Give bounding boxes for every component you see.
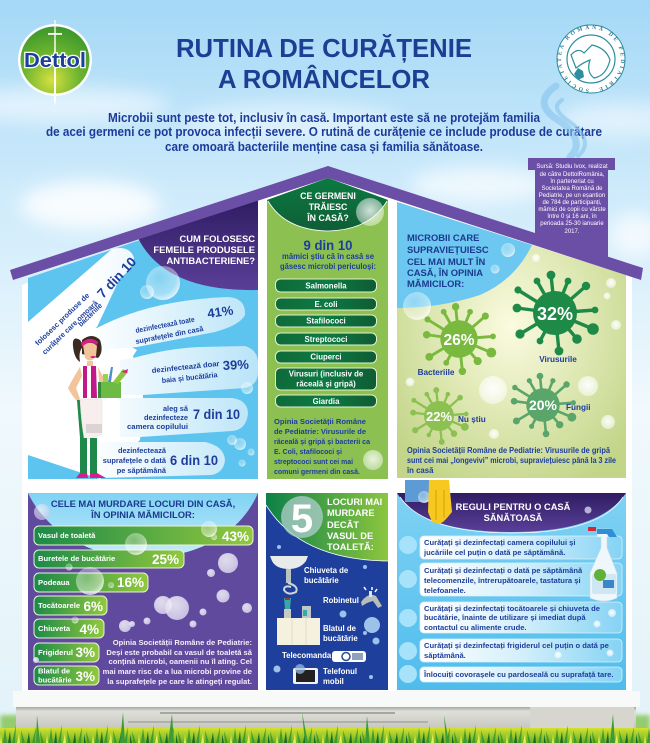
source box: Societatea Română de <box>541 186 603 192</box>
bar labels: Podeaua <box>38 578 70 587</box>
source box: de 784 de participanți, <box>542 200 602 206</box>
rule text: Curățați și dezinfectați o dată pe săptămână <box>424 566 583 575</box>
virus: 32% <box>513 271 599 364</box>
source box: Sursă: Studiu Ivox, realizat <box>536 164 608 170</box>
green header: TOALETĂ: <box>327 542 374 552</box>
intro text: Microbii sunt peste tot, inclusiv în casă. Important este să ne protejăm familia <box>108 111 541 125</box>
virus: 22%: 22% <box>426 409 452 424</box>
ray 2: 41%: 41% <box>206 302 235 321</box>
roof <box>10 166 643 280</box>
ray 3: 39% <box>120 346 258 395</box>
icon: mobile phone: mobil <box>323 677 344 686</box>
ray 3: 39%: baia și bucătăria <box>161 370 219 385</box>
heading: CELE MAI MURDARE LOCURI DIN CASĂ, <box>51 498 235 509</box>
heading: MĂMICILOR: <box>407 278 464 289</box>
icon: woman with cleaning box <box>68 336 128 478</box>
opinion text: Opinia Societății Române <box>274 417 366 426</box>
chimney smoke <box>544 86 585 157</box>
green header: TRĂIESC <box>309 202 348 212</box>
bar labels: Buretele de bucătărie <box>38 554 115 563</box>
blue corner <box>397 202 532 308</box>
virus: 26% <box>418 303 496 377</box>
icon: mobile phone: Telefonul <box>323 667 357 676</box>
rule text: bucătărie, înainte de utilizare și imediat după <box>424 613 586 622</box>
bubbles <box>554 609 616 658</box>
bubbles <box>33 504 252 663</box>
rule text: Curățați și dezinfectați camera copilului și <box>424 538 576 547</box>
bubble <box>363 450 383 470</box>
bar values: 6% <box>83 599 103 614</box>
bar labels: Frigiderul <box>38 648 73 657</box>
icon: faucet: Robinetul <box>323 596 359 605</box>
title <box>176 33 472 94</box>
ray 5: 6 din 10 weekly: pe săptămână <box>117 466 167 475</box>
intro text: care omoară bacteriile menține casa și familia sănătoase. <box>165 140 483 154</box>
logo: Dettol <box>18 20 92 106</box>
icon: faucet <box>323 587 382 608</box>
purple header: CUM FOLOSESC <box>179 233 255 244</box>
rule text: Înlocuiți covorașele cu pardoseală cu suprafață tare. <box>423 670 614 679</box>
opinion text <box>274 417 371 476</box>
source box: între 0 și 16 ani, în <box>546 214 597 220</box>
opinion text: de Pediatrie: Virusurile de <box>274 427 366 436</box>
rule text: telefoanele. <box>424 586 466 595</box>
icon: remote control: Telecomanda <box>282 651 332 660</box>
icon: sink <box>270 556 349 594</box>
germ list: Stafilococi <box>306 316 346 326</box>
source box: perioada 25-30 ianuarie <box>540 221 604 227</box>
stat: 9 din 10: găsesc microbi periculoși: <box>280 262 376 271</box>
germ list: E. coli <box>315 300 337 309</box>
opinion text: Deși este probabil ca vasul de toaletă să <box>106 648 253 657</box>
stat: 9 din 10: 9 din 10 <box>304 237 353 253</box>
rule text <box>423 538 614 679</box>
ray 2: 41% <box>97 297 245 350</box>
grass <box>0 712 650 743</box>
opinion text: mai mare risc de a lua microbi provine de <box>103 667 252 676</box>
stat: 9 din 10: mămici știu că în casă se <box>282 252 375 261</box>
heading <box>407 232 489 289</box>
ray 1: 7 din 10 use products: bacteriile <box>76 301 104 328</box>
virus: 20%: 20% <box>529 397 558 413</box>
germ list <box>276 279 376 407</box>
steps <box>16 707 636 729</box>
icon: sink: bucătărie <box>304 576 339 585</box>
rule text: jucăriile cel puțin o dată pe săptămână. <box>423 548 565 557</box>
green header: ÎN CASĂ? <box>306 212 349 223</box>
bubbles <box>403 243 621 439</box>
bar labels: Chiuveta <box>38 624 71 633</box>
house walls <box>22 175 632 692</box>
green header <box>266 493 388 561</box>
rule text: Curățați și dezinfectați frigiderul cel puțin o dată pe <box>424 641 609 650</box>
stat: 9 din 10 <box>280 237 376 271</box>
green header: 5 <box>291 497 313 541</box>
source box: de către DettolRomânia, <box>540 172 605 178</box>
opinion text: streptococi sunt cei mai <box>274 457 353 466</box>
ray 1: 7 din 10 use products <box>28 248 139 400</box>
heading: CEL MAI MULT ÎN <box>407 256 486 267</box>
green header: MURDARE <box>327 508 375 518</box>
bar values: 4% <box>79 622 99 637</box>
icon: kitchen counter: bucătărie <box>323 634 358 643</box>
bar values: 3% <box>75 669 95 684</box>
logo: Dettol: Dettol <box>24 50 86 72</box>
opinion text: comuni germeni din casă. <box>274 467 360 476</box>
title: RUTINA DE CURĂȚENIE <box>176 33 472 63</box>
intro text: de acei germeni ce pot provoca infecții severe. O rutină de curățenie ce include produse de curățare <box>46 125 602 139</box>
ray 4: 7 din 10 child room: aleg să <box>163 404 189 413</box>
source box <box>528 158 615 258</box>
icon: kitchen counter: Blatul de <box>323 624 357 633</box>
ray 4: 7 din 10 child room: dezinfecteze <box>144 413 188 422</box>
icon: kitchen counter <box>277 598 358 645</box>
ray 1: 7 din 10 use products: curățare care omoară <box>40 298 100 356</box>
opinion text: Opinia Societății Române de Pediatrie: <box>113 638 252 647</box>
bar values: 16% <box>117 575 144 590</box>
bar values: 3% <box>75 645 95 660</box>
virus: 22% <box>410 387 486 445</box>
heading: CASĂ, ÎN OPINIA <box>407 267 483 278</box>
ray 5: 6 din 10 weekly: dezinfectează <box>118 446 167 455</box>
ray 3: 39%: dezinfectează doar <box>151 359 220 375</box>
ray 2: 41%: dezinfectează toate <box>135 315 195 335</box>
source box: mămici de copii cu vârste <box>538 207 606 213</box>
virus: 32%: Virusurile <box>539 355 577 364</box>
bar labels: Vasul de toaletă <box>38 531 96 540</box>
green header: CE GERMENI <box>300 191 356 201</box>
ray 1: 7 din 10 use products: folosesc produse de <box>33 291 91 347</box>
germ list: Streptococi <box>305 335 347 344</box>
green header: VASUL DE <box>327 531 373 541</box>
opinion text: răceală și gripă și bacterii ca <box>274 437 371 446</box>
panel: how women use products <box>28 200 258 479</box>
rule text: contactul cu alimente crude. <box>424 623 527 632</box>
bar chart <box>34 526 253 685</box>
opinion text: în casă <box>406 466 434 475</box>
ray 5: 6 din 10 weekly <box>100 442 225 478</box>
virus: 32%: 32% <box>537 304 573 324</box>
green header: LOCURI MAI <box>327 497 382 507</box>
icon: spray bottle <box>588 527 617 601</box>
panel: dirtiest places <box>28 493 258 690</box>
germ list: Salmonella <box>305 282 347 290</box>
virus: 26%: 26% <box>443 332 475 349</box>
ray 4: 7 din 10 child room <box>120 398 248 437</box>
opinion text: la suprafețele pe care le atingeți regulat. <box>107 677 252 686</box>
opinion text <box>103 638 253 686</box>
bar values <box>75 529 249 684</box>
logo: Societatea Română de Pediatrie: SOCIETATEA ROMÂNĂ DE PEDIATRIE <box>558 24 624 92</box>
virus: 20%: Fungii <box>566 403 591 412</box>
icon: glove and sponge <box>405 480 452 524</box>
opinion text: E. Coli, stafilococi și <box>274 447 342 456</box>
germ list: Giardia <box>313 397 340 406</box>
bubbles <box>140 266 254 466</box>
panel: 5 places dirtier than toilet <box>266 493 388 690</box>
bar values: 43% <box>222 529 249 544</box>
ray 5: 6 din 10 weekly: 6 din 10 <box>170 452 218 468</box>
ray 4: 7 din 10 child room: 7 din 10 <box>193 406 240 422</box>
bar labels: Blatul de <box>38 666 70 676</box>
heading: SUPRAVIEȚUIESC <box>407 244 489 255</box>
purple header: FEMEILE PRODUSELE <box>153 244 255 255</box>
icon: remote control <box>282 651 366 662</box>
heading: MICROBII CARE <box>407 232 479 243</box>
icon: sink: Chiuveta de <box>304 566 349 575</box>
germ list: Ciuperci <box>310 352 342 362</box>
icon: mobile phone <box>293 667 357 686</box>
purple header: REGULI PENTRU O CASĂ <box>456 502 571 512</box>
opinion text <box>406 446 617 475</box>
title: A ROMÂNCELOR <box>218 64 430 94</box>
purple header: SĂNĂTOASĂ <box>484 513 543 523</box>
bubbles <box>274 545 380 679</box>
opinion text: sunt cei mai „longevivi” microbi, supraviețuiesc până la 3 zile <box>407 456 617 465</box>
bar labels: bucătărie <box>38 676 72 684</box>
house base ledge <box>13 691 640 707</box>
intro text <box>46 111 602 154</box>
bar labels: Tocătoarele <box>38 601 80 610</box>
purple header <box>397 493 626 533</box>
germ list: Virusuri (inclusiv de <box>289 370 364 378</box>
rule text: telecomenzile, întrerupătoarele, tastatura și <box>424 576 581 585</box>
green header <box>267 178 388 231</box>
source box: 2017. <box>564 229 580 235</box>
rule bullets <box>399 536 417 683</box>
source box: Pediatrie, pe un eșantion <box>539 193 605 199</box>
purple header: ANTIBACTERIENE? <box>166 255 255 266</box>
panel: rules for a healthy house <box>397 480 626 690</box>
bar labels <box>38 531 115 684</box>
rule text: Curățați și dezinfectați tocătoarele și chiuveta de <box>424 604 600 613</box>
virus: 20% <box>511 373 591 437</box>
rules list <box>420 536 622 682</box>
ray 1: 7 din 10 use products: 7 din 10 <box>94 254 139 301</box>
panel: germs in the house <box>267 178 388 479</box>
ray 4: 7 din 10 child room: camera copilului <box>127 422 188 431</box>
germ list: răceală și gripă) <box>296 380 356 388</box>
rule text: săptămână. <box>424 651 466 660</box>
virus: 26%: Bacteriile <box>418 368 455 377</box>
heading <box>51 498 235 520</box>
green header: DECÂT <box>327 519 359 530</box>
opinion text: conțină microbi, oamenii nu îl ating. Cel <box>109 657 252 666</box>
bar values: 25% <box>152 552 179 567</box>
panel: microbes that survive longest <box>397 202 626 478</box>
ray 3: 39%: 39% <box>222 357 250 373</box>
source box: în parteneriat cu <box>549 179 594 185</box>
virus: 22%: Nu știu <box>458 415 486 424</box>
heading: ÎN OPINIA MĂMICILOR: <box>90 509 195 520</box>
opinion text: Opinia Societății Române de Pediatrie: Virusurile de gripă <box>407 446 611 455</box>
ray 5: 6 din 10 weekly: suprafețele o dată <box>103 456 167 465</box>
purple header <box>138 200 258 290</box>
ray 2: 41%: suprafețele din casă <box>135 324 205 346</box>
